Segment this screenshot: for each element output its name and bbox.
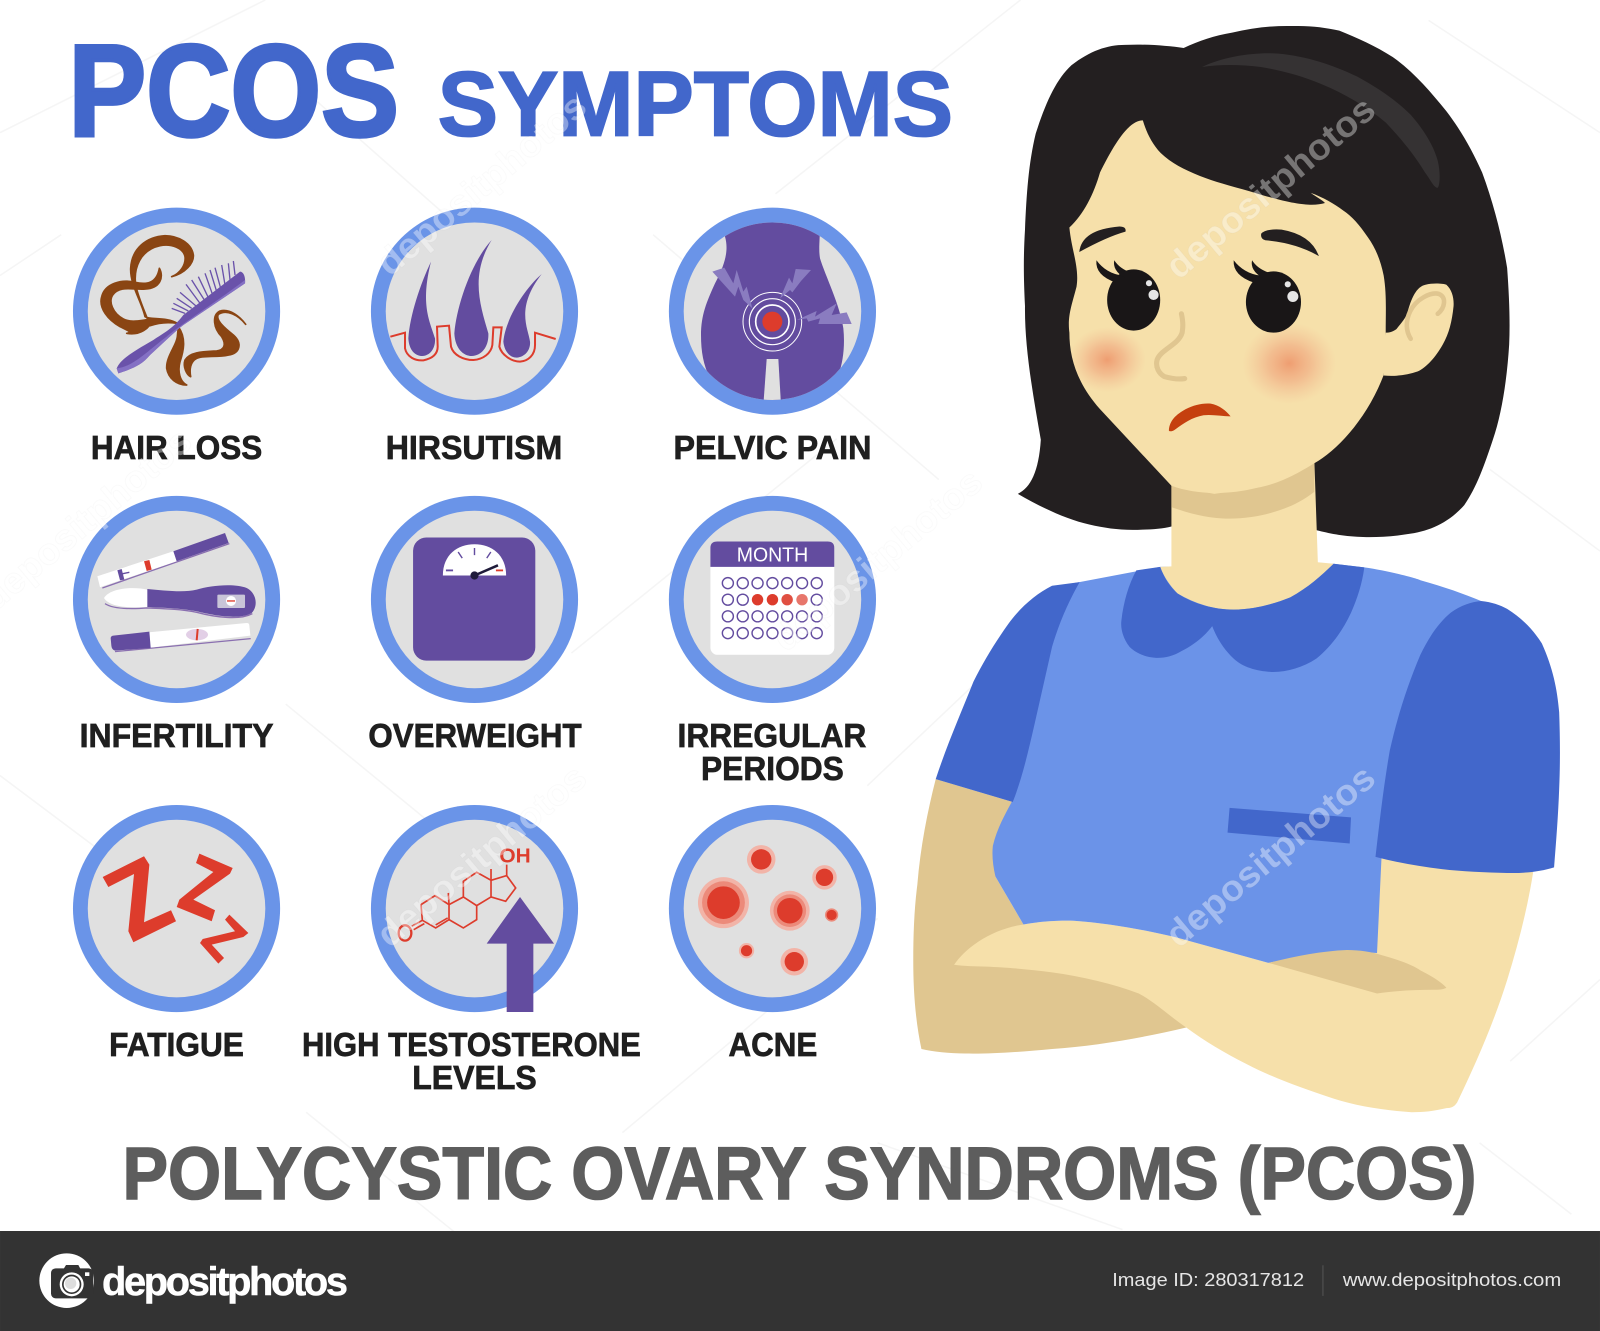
torso: left sleeve [936, 582, 1080, 802]
title: SYMPTOMS [438, 54, 953, 156]
torso: upper arm left [913, 779, 1214, 1054]
panel: infertility [73, 496, 280, 703]
watermarks: depositphotos [1157, 756, 1383, 955]
hair highlight [1202, 53, 1440, 188]
icon: hair strands [101, 236, 246, 385]
panel: pelvic pain [669, 208, 876, 418]
title: PCOS [68, 18, 399, 164]
label: INFERTILITY [80, 718, 273, 755]
torso: forearm and right arm [954, 853, 1533, 1112]
label: HIRSUTISM [386, 430, 562, 467]
label: OVERWEIGHT [368, 718, 582, 755]
icon: testosterone molecule: OH [499, 844, 531, 867]
label: PELVIC PAIN [673, 430, 871, 467]
icon: sleep Z letters [103, 854, 248, 964]
panel: high testosterone [371, 805, 578, 1012]
illustration: woman [913, 26, 1560, 1112]
label: HAIR LOSS [91, 430, 262, 467]
panel: overweight [371, 496, 578, 703]
label: FATIGUE [109, 1027, 244, 1064]
hair back [1018, 26, 1510, 537]
icon: pain bolts [712, 268, 852, 324]
label: HIGH TESTOSTERONE [302, 1027, 641, 1064]
torso: shirt [992, 564, 1481, 963]
icon: pelvis [701, 222, 844, 418]
watermarks: depositphotos [369, 85, 594, 284]
torso: pocket [1228, 808, 1351, 843]
head: mouth [1169, 404, 1231, 431]
panel: fatigue [73, 805, 280, 1012]
head: eyebrows [1079, 227, 1319, 256]
icon: calendar [710, 542, 834, 655]
label [302, 1027, 641, 1097]
footer url: www.depositphotos.com [1342, 1269, 1561, 1290]
icon: test strip one [97, 533, 229, 588]
label: IRREGULAR [678, 718, 866, 755]
title [68, 18, 953, 164]
watermarks: depositphotos [369, 756, 594, 955]
watermarks: depositphotos [765, 461, 990, 659]
footer logo icon [39, 1253, 94, 1308]
panel: hirsutism [371, 208, 578, 415]
head: eyes [1096, 260, 1301, 333]
icon: calendar: MONTH [737, 545, 808, 567]
icon: pain target [743, 292, 802, 351]
head: blush [1075, 329, 1328, 398]
label: LEVELS [412, 1060, 537, 1097]
footer image id: Image ID: 280317812 [1112, 1269, 1304, 1290]
panel: hair loss [73, 208, 280, 415]
panel: irregular periods [669, 496, 876, 703]
bottom heading: POLYCYSTIC OVARY SYNDROMS (PCOS) [122, 1132, 1477, 1215]
icon: acne spots [698, 845, 838, 975]
footer logo text: depositphotos [102, 1260, 348, 1304]
icon: test strip two [111, 623, 251, 652]
head: neck [1160, 459, 1334, 610]
torso: hand shadow [1268, 950, 1446, 993]
head: neck shadow [1171, 463, 1314, 519]
arrow: increase [487, 897, 554, 1012]
label: PERIODS [701, 751, 844, 788]
icon: hair brush [117, 261, 245, 373]
torso: right sleeve [1376, 601, 1560, 873]
icon: hair follicles [390, 240, 556, 362]
head: ear [1384, 284, 1454, 376]
head: nose [1157, 314, 1185, 379]
watermarks [0, 85, 1383, 955]
icon: testosterone molecule [399, 844, 531, 941]
label: ACNE [729, 1027, 817, 1064]
icon: scale [413, 538, 535, 661]
label [678, 718, 866, 788]
torso: collar [1121, 564, 1364, 672]
footer bar [0, 1231, 1600, 1331]
head: face [1069, 120, 1386, 493]
icon: digital test [104, 585, 256, 618]
watermarks: depositphotos [1157, 88, 1383, 287]
panel: acne [669, 805, 876, 1012]
